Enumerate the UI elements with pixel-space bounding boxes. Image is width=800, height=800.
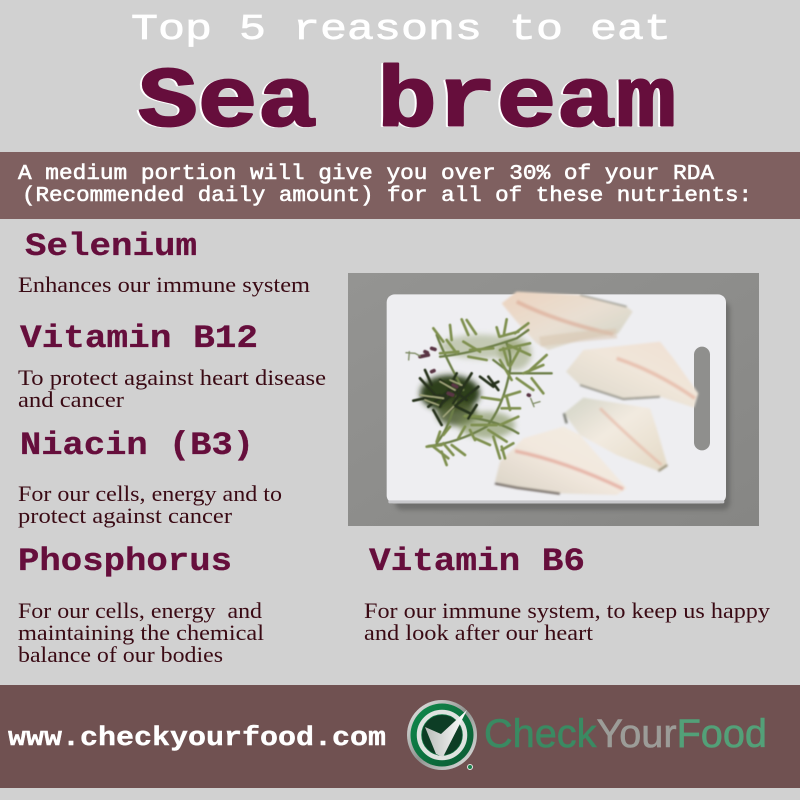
photo: fish fillets on a cutting board xyxy=(348,273,759,526)
website url: www.checkyourfood.com xyxy=(8,724,386,754)
title: top line: Top 5 reasons to eat xyxy=(131,9,671,50)
nutrient: Vitamin B12: and cancer xyxy=(18,387,125,412)
logo icon: green check badge xyxy=(407,700,477,770)
nutrient: Phosphorus: Phosphorus xyxy=(18,543,232,580)
nutrient: Selenium: Selenium xyxy=(25,228,197,265)
title: Sea bream: Sea bream xyxy=(136,55,674,152)
nutrient: Phosphorus: maintaining the chemical xyxy=(18,620,264,645)
nutrient: Vitamin B12: To protect against heart disease xyxy=(18,365,326,390)
needles: dark cluster xyxy=(413,370,498,425)
purple flower buds xyxy=(420,348,529,395)
herbs xyxy=(406,319,552,465)
logo wordmark: CheckYourFood xyxy=(484,712,767,756)
nutrient: Phosphorus: For our cells, energy and xyxy=(18,598,262,623)
nutrient: Vitamin B6 xyxy=(364,543,770,645)
needles: light xyxy=(427,319,547,465)
fillets xyxy=(495,292,698,495)
nutrient: Vitamin B12 xyxy=(18,320,326,412)
nutrient: Niacin: For our cells, energy and to xyxy=(18,481,282,506)
nutrient: Vitamin B6: Vitamin B6 xyxy=(369,543,585,580)
nutrient: Niacin: protect against cancer xyxy=(18,503,233,528)
footer band xyxy=(0,685,800,788)
nutrient: Selenium: Enhances our immune system xyxy=(18,272,310,297)
intro band xyxy=(0,152,800,219)
nutrient: Vitamin B6: For our immune system, to keep us happy xyxy=(364,598,770,623)
intro band: (Recommended daily amount) for all of these nutrients: xyxy=(22,185,752,208)
nutrient: Niacin xyxy=(18,427,282,528)
nutrient: Selenium xyxy=(18,228,310,297)
title: Sea bream: Sea bream xyxy=(138,54,676,152)
nutrient: Vitamin B12: Vitamin B12 xyxy=(20,320,258,357)
stems xyxy=(428,330,552,446)
nutrient: Vitamin B6: and look after our heart xyxy=(364,620,593,645)
nutrient: Phosphorus: balance of our bodies xyxy=(18,642,223,667)
nutrient: Niacin: Niacin (B3) xyxy=(20,427,254,464)
intro band: A medium portion will give you over 30% of your RDA xyxy=(18,163,714,186)
nutrient: Phosphorus xyxy=(18,543,264,667)
